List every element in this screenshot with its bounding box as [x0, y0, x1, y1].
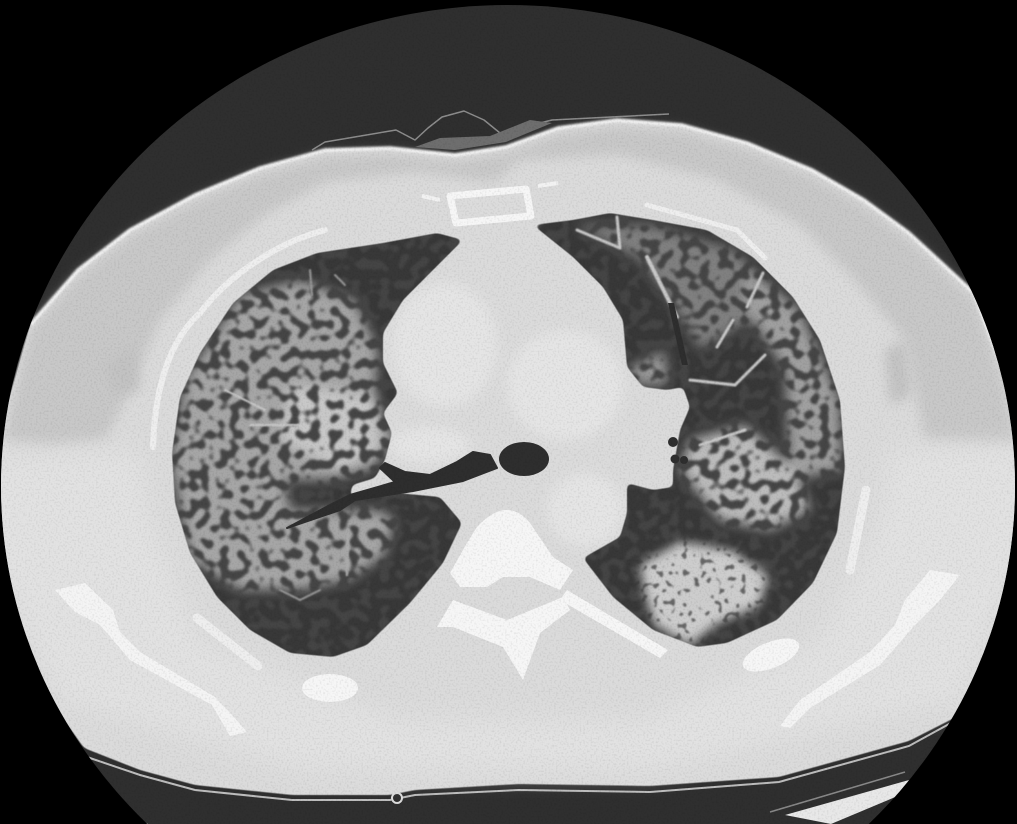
muscle shading around chest wall [105, 340, 912, 405]
lungs [172, 212, 846, 658]
mediastinum vessels [390, 283, 623, 546]
sternum [422, 183, 558, 223]
honeycomb cells [172, 216, 844, 656]
septa and vessels [225, 217, 765, 600]
skin fold above sternum [312, 111, 669, 150]
posterior ribs [302, 638, 800, 702]
bright skin line [30, 120, 1005, 375]
posterior dense patch [634, 536, 774, 646]
interstitial disease patches [170, 225, 842, 590]
bronchi and trachea [287, 303, 688, 528]
lower body soft tissue [0, 445, 1017, 770]
scapula right [780, 570, 960, 728]
examination table [70, 718, 960, 824]
gown strip above the chest [415, 120, 552, 150]
scapula left [55, 583, 247, 736]
subcutaneous fat band [3, 126, 1017, 445]
vertebra and spine [437, 510, 668, 680]
chest wall ribs [153, 205, 866, 666]
